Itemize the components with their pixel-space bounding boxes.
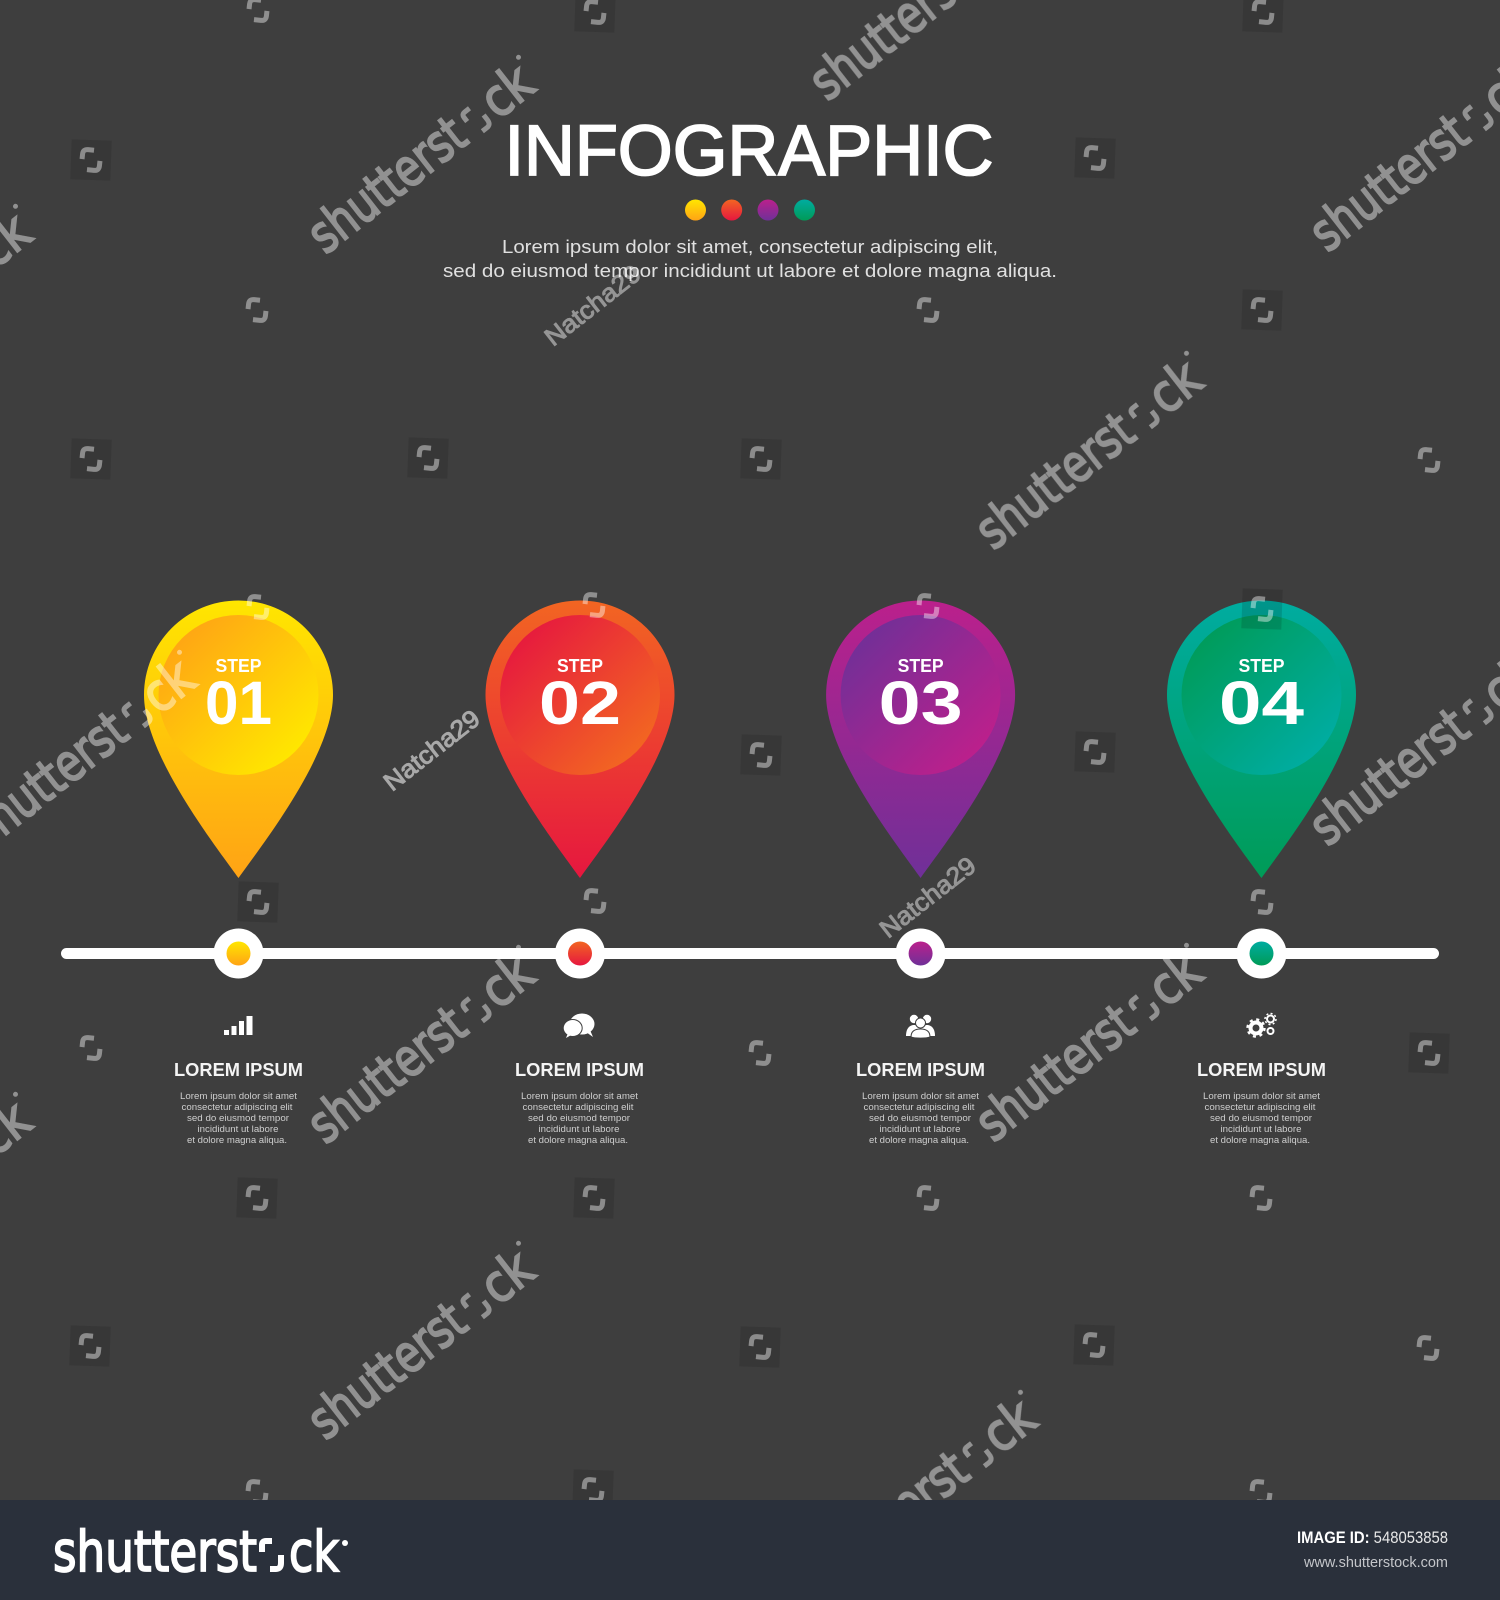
text block: column 2: LOREM IPSUM bbox=[515, 1060, 644, 1080]
title: INFOGRAPHIC bbox=[504, 112, 994, 191]
footer logo: ck bbox=[289, 1520, 339, 1585]
text block: column 2 bbox=[515, 1060, 644, 1146]
text block: column 2: et dolore magna aliqua. bbox=[528, 1135, 628, 1146]
text block: column 1: LOREM IPSUM bbox=[174, 1060, 303, 1080]
text block: column 3: sed do eiusmod tempor bbox=[869, 1113, 972, 1124]
text block: column 2: sed do eiusmod tempor bbox=[528, 1113, 631, 1124]
watermark: shutterstock L: shutterst bbox=[798, 1440, 980, 1600]
watermark: shutterstock K: shutterst bbox=[296, 1291, 478, 1451]
pin: step 01 bbox=[144, 600, 333, 878]
watermark: shutterstock A: ck bbox=[469, 53, 545, 131]
text block: column 4: incididunt ut labore bbox=[1220, 1124, 1302, 1135]
colour dots row bbox=[685, 200, 815, 220]
text block: column 4 bbox=[1197, 1060, 1326, 1146]
pin: step 04: 04 bbox=[1219, 669, 1304, 737]
text block: column 2: Lorem ipsum dolor sit amet bbox=[521, 1091, 638, 1102]
pin: step 02: STEP bbox=[557, 656, 603, 676]
text block: column 1 bbox=[174, 1060, 303, 1146]
watermark: shutterstock H: shutterst bbox=[296, 995, 478, 1155]
watermark: shutterstock E: shutterst bbox=[964, 401, 1146, 561]
watermark: shutterstock H: ck bbox=[469, 943, 545, 1021]
text block: column 2: incididunt ut labore bbox=[538, 1124, 620, 1135]
pin: step 02 bbox=[486, 600, 674, 878]
watermark: shutterstock I: ck bbox=[1137, 941, 1213, 1019]
subtitle text: sed do eiusmod tempor incididunt ut labore et dolore magna aliqua. bbox=[443, 260, 1057, 281]
text block: column 4: et dolore magna aliqua. bbox=[1210, 1135, 1310, 1146]
text block: column 3 bbox=[856, 1060, 985, 1146]
watermark: shutterstock I: shutterst bbox=[964, 993, 1146, 1153]
subtitle text bbox=[443, 236, 1057, 281]
text block: column 1: consectetur adipiscing elit bbox=[182, 1102, 293, 1113]
watermark: Natcha29 one: Natcha29 bbox=[539, 259, 647, 352]
text block: column 3: LOREM IPSUM bbox=[856, 1060, 985, 1080]
footer bar bbox=[0, 1500, 1500, 1600]
watermark: Natcha29 three: Natcha29 bbox=[874, 851, 982, 944]
text block: column 3: Lorem ipsum dolor sit amet bbox=[862, 1091, 979, 1102]
website url: www.shutterstock.com bbox=[1303, 1554, 1448, 1571]
watermark: shutterstock D bbox=[0, 197, 48, 414]
watermark: shutterstock A: shutterst bbox=[296, 105, 478, 265]
text block: column 3: consectetur adipiscing elit bbox=[864, 1102, 975, 1113]
footer logo: shutterst bbox=[53, 1520, 257, 1585]
pin: step 01: STEP bbox=[216, 656, 262, 676]
pin: step 04: STEP bbox=[1238, 656, 1284, 676]
text block: column 1: incididunt ut labore bbox=[198, 1124, 278, 1135]
image id: IMAGE ID: 548053858 bbox=[1297, 1528, 1448, 1547]
icon: signal bars bbox=[224, 1016, 252, 1035]
text block: column 1: Lorem ipsum dolor sit amet bbox=[180, 1091, 297, 1102]
text block: column 2: consectetur adipiscing elit bbox=[522, 1102, 634, 1113]
pin: step 04 bbox=[1167, 600, 1356, 878]
watermark: shutterstock K: ck bbox=[469, 1239, 545, 1317]
watermark: shutterstock E: ck bbox=[1137, 349, 1213, 427]
watermark: shutterstock F: ck bbox=[130, 648, 206, 726]
text block: column 3: et dolore magna aliqua. bbox=[869, 1135, 969, 1146]
icon: gears bbox=[1248, 1014, 1276, 1036]
timeline bbox=[61, 928, 1439, 978]
text block: column 4: LOREM IPSUM bbox=[1197, 1060, 1326, 1080]
pin: step 02: 02 bbox=[539, 669, 621, 737]
text block: column 4: sed do eiusmod tempor bbox=[1210, 1113, 1313, 1124]
text block: column 4: consectetur adipiscing elit bbox=[1204, 1102, 1316, 1113]
text block: column 3: incididunt ut labore bbox=[880, 1124, 960, 1135]
text block: column 1: et dolore magna aliqua. bbox=[187, 1135, 287, 1146]
pin: step 01: 01 bbox=[205, 669, 272, 737]
text block: column 4: Lorem ipsum dolor sit amet bbox=[1203, 1091, 1320, 1102]
pin: step 03 bbox=[826, 600, 1015, 878]
pin: step 03: 03 bbox=[879, 669, 963, 737]
watermark: Natcha29 two: Natcha29 bbox=[378, 704, 486, 797]
watermark: shutterstock J bbox=[0, 1085, 48, 1302]
icon: chat bubbles bbox=[563, 1014, 594, 1038]
watermark: shutterstock L: ck bbox=[971, 1388, 1047, 1466]
icon: people group bbox=[906, 1015, 935, 1038]
text block: column 1: sed do eiusmod tempor bbox=[187, 1113, 290, 1124]
pin: step 03: STEP bbox=[898, 656, 944, 676]
subtitle text: Lorem ipsum dolor sit amet, consectetur adipiscing elit, bbox=[502, 236, 998, 257]
